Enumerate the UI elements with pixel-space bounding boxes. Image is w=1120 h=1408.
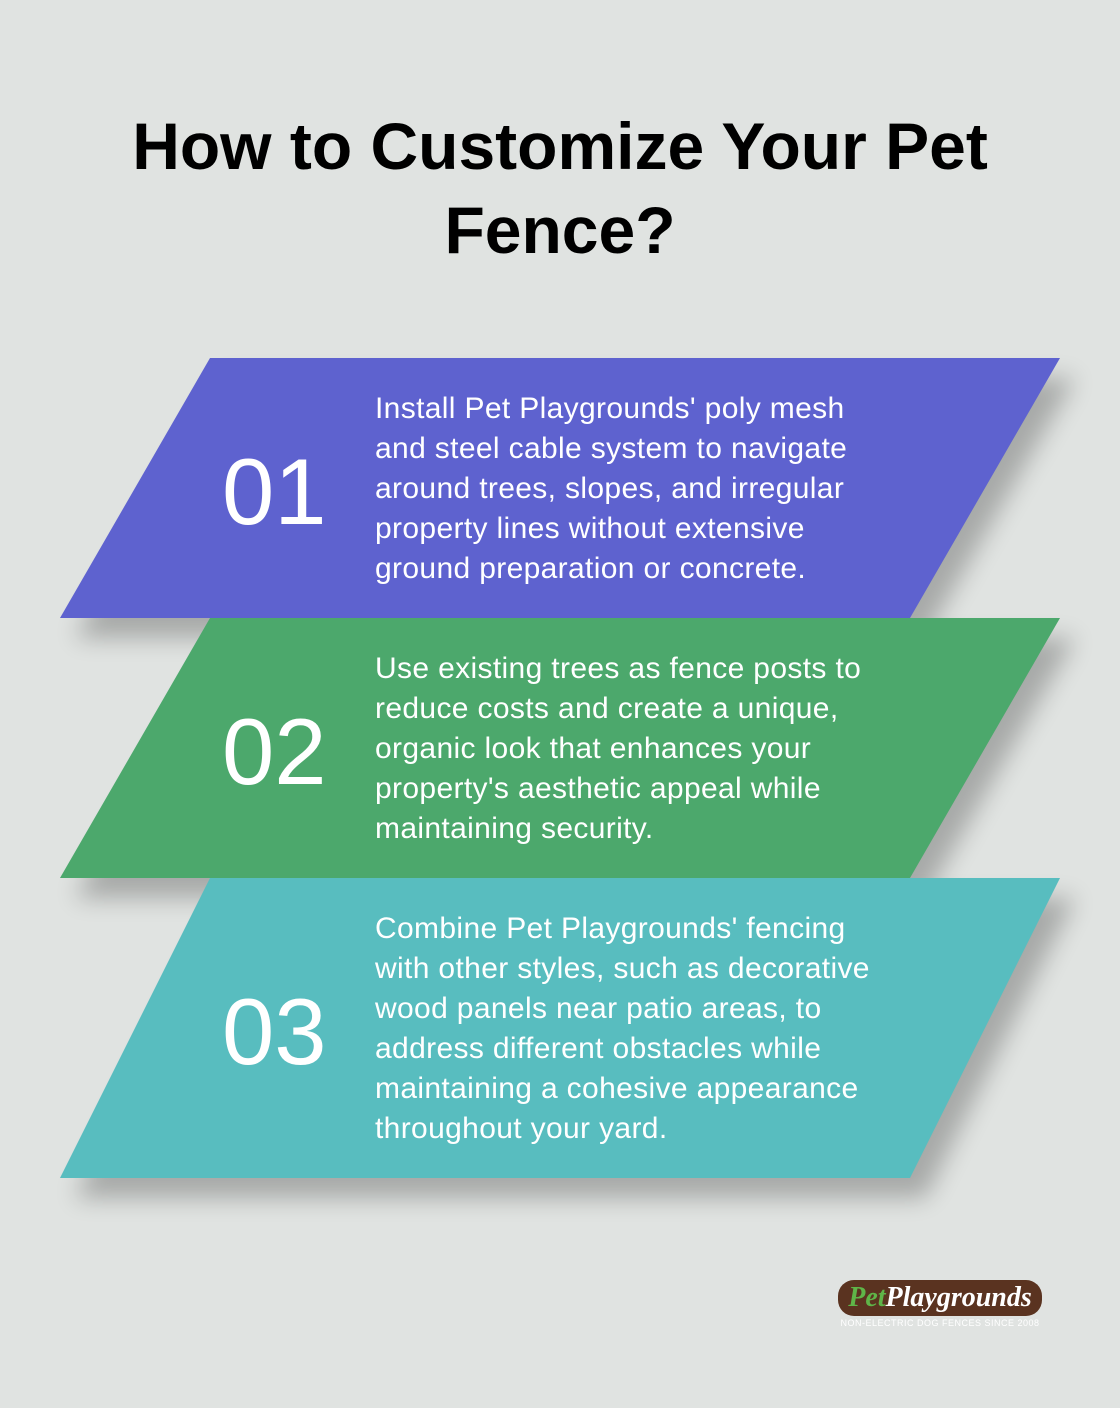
logo (838, 1280, 1042, 1328)
text 1: and steel cable system to navigate (375, 432, 847, 465)
text 3: address different obstacles while (375, 1032, 821, 1065)
text 2: reduce costs and create a unique, (375, 692, 839, 725)
title (132, 109, 988, 267)
text 1: property lines without extensive (375, 512, 805, 545)
number 01: 01 (222, 439, 327, 544)
text 3: Combine Pet Playgrounds' fencing (375, 912, 846, 945)
text 3: maintaining a cohesive appearance (375, 1072, 859, 1105)
number 02: 02 (222, 699, 327, 804)
title: Fence? (444, 193, 676, 267)
text 3: with other styles, such as decorative (375, 952, 870, 985)
title: How to Customize Your Pet (132, 109, 988, 183)
text 3 (375, 912, 870, 1145)
text 2: Use existing trees as fence posts to (375, 652, 861, 685)
logo: NON-ELECTRIC DOG FENCES SINCE 2008 (840, 1318, 1040, 1328)
text 1 (375, 392, 847, 585)
text 1: Install Pet Playgrounds' poly mesh (375, 392, 845, 425)
text 2: property's aesthetic appeal while (375, 772, 821, 805)
text 2: maintaining security. (375, 812, 654, 845)
number 03: 03 (222, 979, 327, 1084)
text 3: throughout your yard. (375, 1112, 668, 1145)
logo: PetPlaygrounds (848, 1282, 1032, 1313)
text 2: organic look that enhances your (375, 732, 811, 765)
band 2 (60, 618, 1060, 878)
band 1 (60, 358, 1060, 618)
band 3 (60, 878, 1060, 1178)
text 1: around trees, slopes, and irregular (375, 472, 844, 505)
text 3: wood panels near patio areas, to (375, 992, 822, 1025)
text 2 (375, 652, 861, 845)
text 1: ground preparation or concrete. (375, 552, 806, 585)
